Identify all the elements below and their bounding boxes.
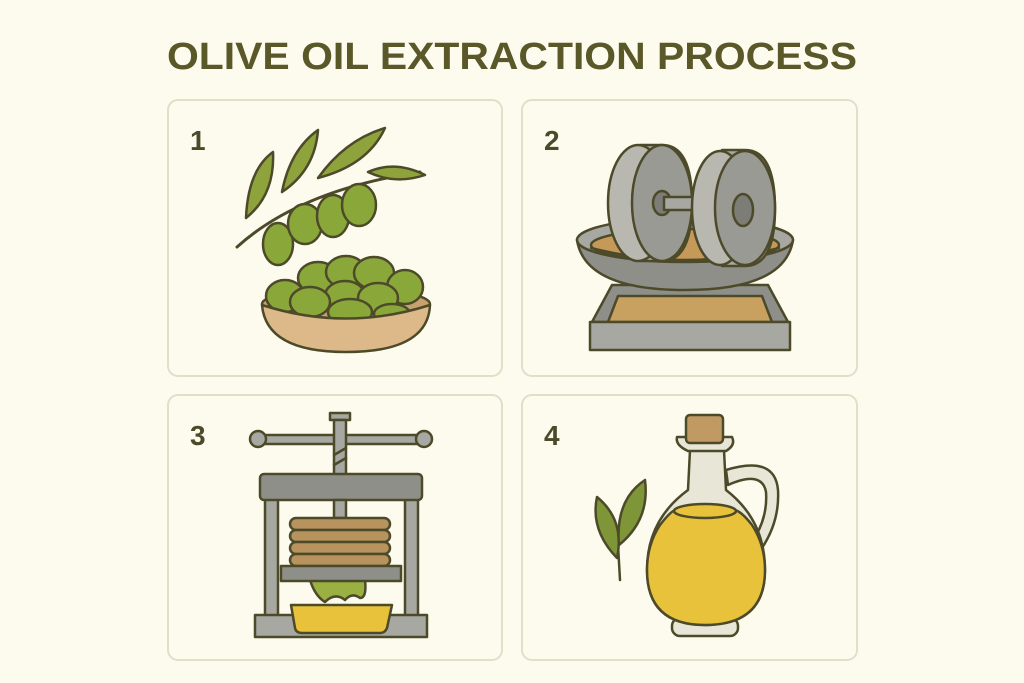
panel: step 2 crushing (522, 100, 857, 376)
icon: bowl of olives (262, 256, 430, 352)
icon: leaves (596, 480, 646, 580)
step number 4: 4 (544, 420, 560, 451)
step number 2: 2 (544, 125, 560, 156)
icon: millstone basin (577, 145, 793, 350)
icon: screw press (250, 413, 432, 637)
icon: oil jug (647, 415, 778, 636)
icon: olive branch (237, 128, 425, 265)
panel: step 4 oil bottle (522, 395, 857, 660)
title: OLIVE OIL EXTRACTION PROCESS (167, 36, 857, 78)
step number 1: 1 (190, 125, 206, 156)
panel: step 1 harvest (168, 100, 502, 376)
panel: step 3 pressing (168, 395, 502, 660)
step number 3: 3 (190, 420, 206, 451)
